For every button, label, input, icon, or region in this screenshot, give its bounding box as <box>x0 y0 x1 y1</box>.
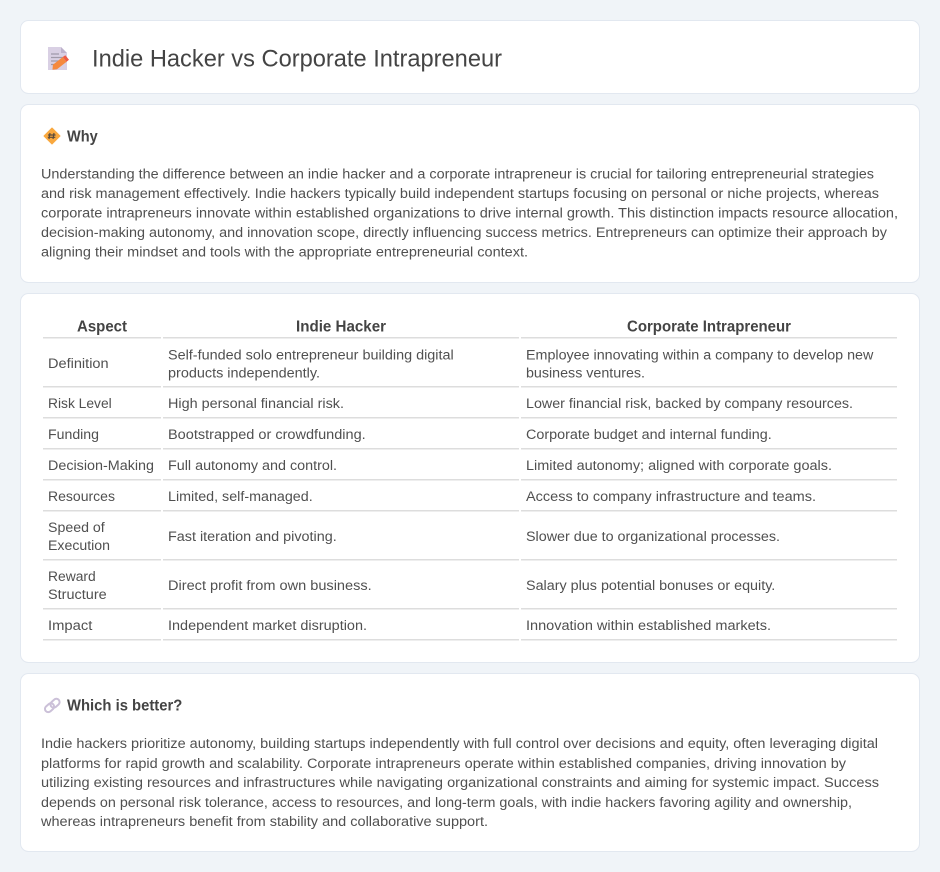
row: decision-making: Limited autonomy; aligned with corporate goals. <box>526 458 832 474</box>
title: Indie Hacker vs Corporate Intrapreneur <box>92 46 502 73</box>
row: impact: Independent market disruption. <box>168 618 367 634</box>
row: resources: Resources <box>48 489 115 505</box>
text block: why paragraph: and risk management effectively. Indie hackers typically build independent startups focusing on personal or niche projects, whereas <box>41 186 879 202</box>
row: speed of execution: Slower due to organizational processes. <box>526 529 780 545</box>
row: impact <box>43 618 897 640</box>
row: definition: Self-funded solo entrepreneur building digital <box>168 348 454 364</box>
icon: chain link <box>44 697 61 713</box>
row: risk level: Risk Level <box>48 396 112 412</box>
row: definition: Definition <box>48 356 109 372</box>
text block: which is better paragraph: Indie hackers prioritize autonomy, building startups independently with full control over decisions and equity, often leveraging digital <box>41 736 878 752</box>
row: risk level: Lower financial risk, backed by company resources. <box>526 396 853 412</box>
panel: which is better <box>20 674 920 852</box>
row: reward structure <box>43 569 897 610</box>
text block: which is better paragraph: depends on personal risk tolerance, access to resources, and long-term goals, with indie hackers favoring agility and ownership, <box>41 795 852 811</box>
text block: why paragraph: corporate intrapreneurs innovate within established organizations to drive internal growth. This distinction impacts resource allocation, <box>41 206 898 222</box>
text block: which is better paragraph: whereas intrapreneurs benefit from stability and collaborative support. <box>40 814 488 830</box>
icon: orange diamond <box>44 128 60 144</box>
row: decision-making <box>43 458 897 480</box>
text block: why paragraph: decision-making autonomy, and innovation scope, directly influencing success metrics. Entrepreneurs can optimize their approach by <box>41 225 888 241</box>
row: resources: Limited, self-managed. <box>168 489 313 505</box>
table header row: Corporate Intrapreneur <box>627 318 791 336</box>
row: decision-making: Full autonomy and control. <box>168 458 337 474</box>
text block: which is better paragraph: platforms for rapid growth and scalability. Corporate intrapreneurs operate within established companies, driving innovation by <box>41 756 847 772</box>
row: reward structure: Salary plus potential bonuses or equity. <box>526 578 775 594</box>
text block: which is better paragraph: utilizing existing resources and infrastructures while navigating organizational constraints and aiming for systemic impact. Success <box>41 775 879 791</box>
panel: why <box>20 104 920 282</box>
table header row: Aspect <box>77 318 128 336</box>
row: definition: products independently. <box>168 366 320 382</box>
row: reward structure: Direct profit from own business. <box>168 578 372 594</box>
text block: which is better paragraph <box>40 736 879 830</box>
row: funding: Funding <box>48 427 99 443</box>
heading: which is better: Which is better? <box>67 698 182 715</box>
row: risk level: High personal financial risk. <box>168 396 344 412</box>
panel: comparison table <box>20 294 920 662</box>
row: resources <box>43 489 897 512</box>
row: speed of execution: Speed of <box>48 520 105 536</box>
text block: why paragraph <box>41 166 898 261</box>
row: risk level <box>43 396 897 418</box>
panel: header <box>20 20 920 94</box>
row: funding: Bootstrapped or crowdfunding. <box>168 427 366 443</box>
row: resources: Access to company infrastructure and teams. <box>526 489 816 505</box>
icon: document with pencil <box>48 47 69 70</box>
row: impact: Impact <box>48 618 92 634</box>
row: definition: business ventures. <box>526 366 645 382</box>
row: funding: Corporate budget and internal funding. <box>526 427 772 443</box>
text block: why paragraph: aligning their mindset and tools with the appropriate entrepreneurial context. <box>41 245 528 261</box>
row: reward structure: Structure <box>48 587 107 603</box>
row: speed of execution <box>43 520 897 560</box>
row: speed of execution: Fast iteration and pivoting. <box>168 529 337 545</box>
row: decision-making: Decision-Making <box>48 458 154 474</box>
table header row: Indie Hacker <box>296 318 386 336</box>
row: definition: Employee innovating within a company to develop new <box>526 348 874 364</box>
row: speed of execution: Execution <box>48 538 110 554</box>
row: impact: Innovation within established markets. <box>526 618 771 634</box>
row: funding <box>43 427 897 450</box>
row: definition <box>43 348 897 388</box>
text block: why paragraph: Understanding the difference between an indie hacker and a corporate intrapreneur is crucial for tailoring entrepreneurial strategies <box>41 166 874 182</box>
table header row <box>43 318 897 338</box>
row: reward structure: Reward <box>48 569 96 585</box>
heading: why: Why <box>67 129 98 146</box>
